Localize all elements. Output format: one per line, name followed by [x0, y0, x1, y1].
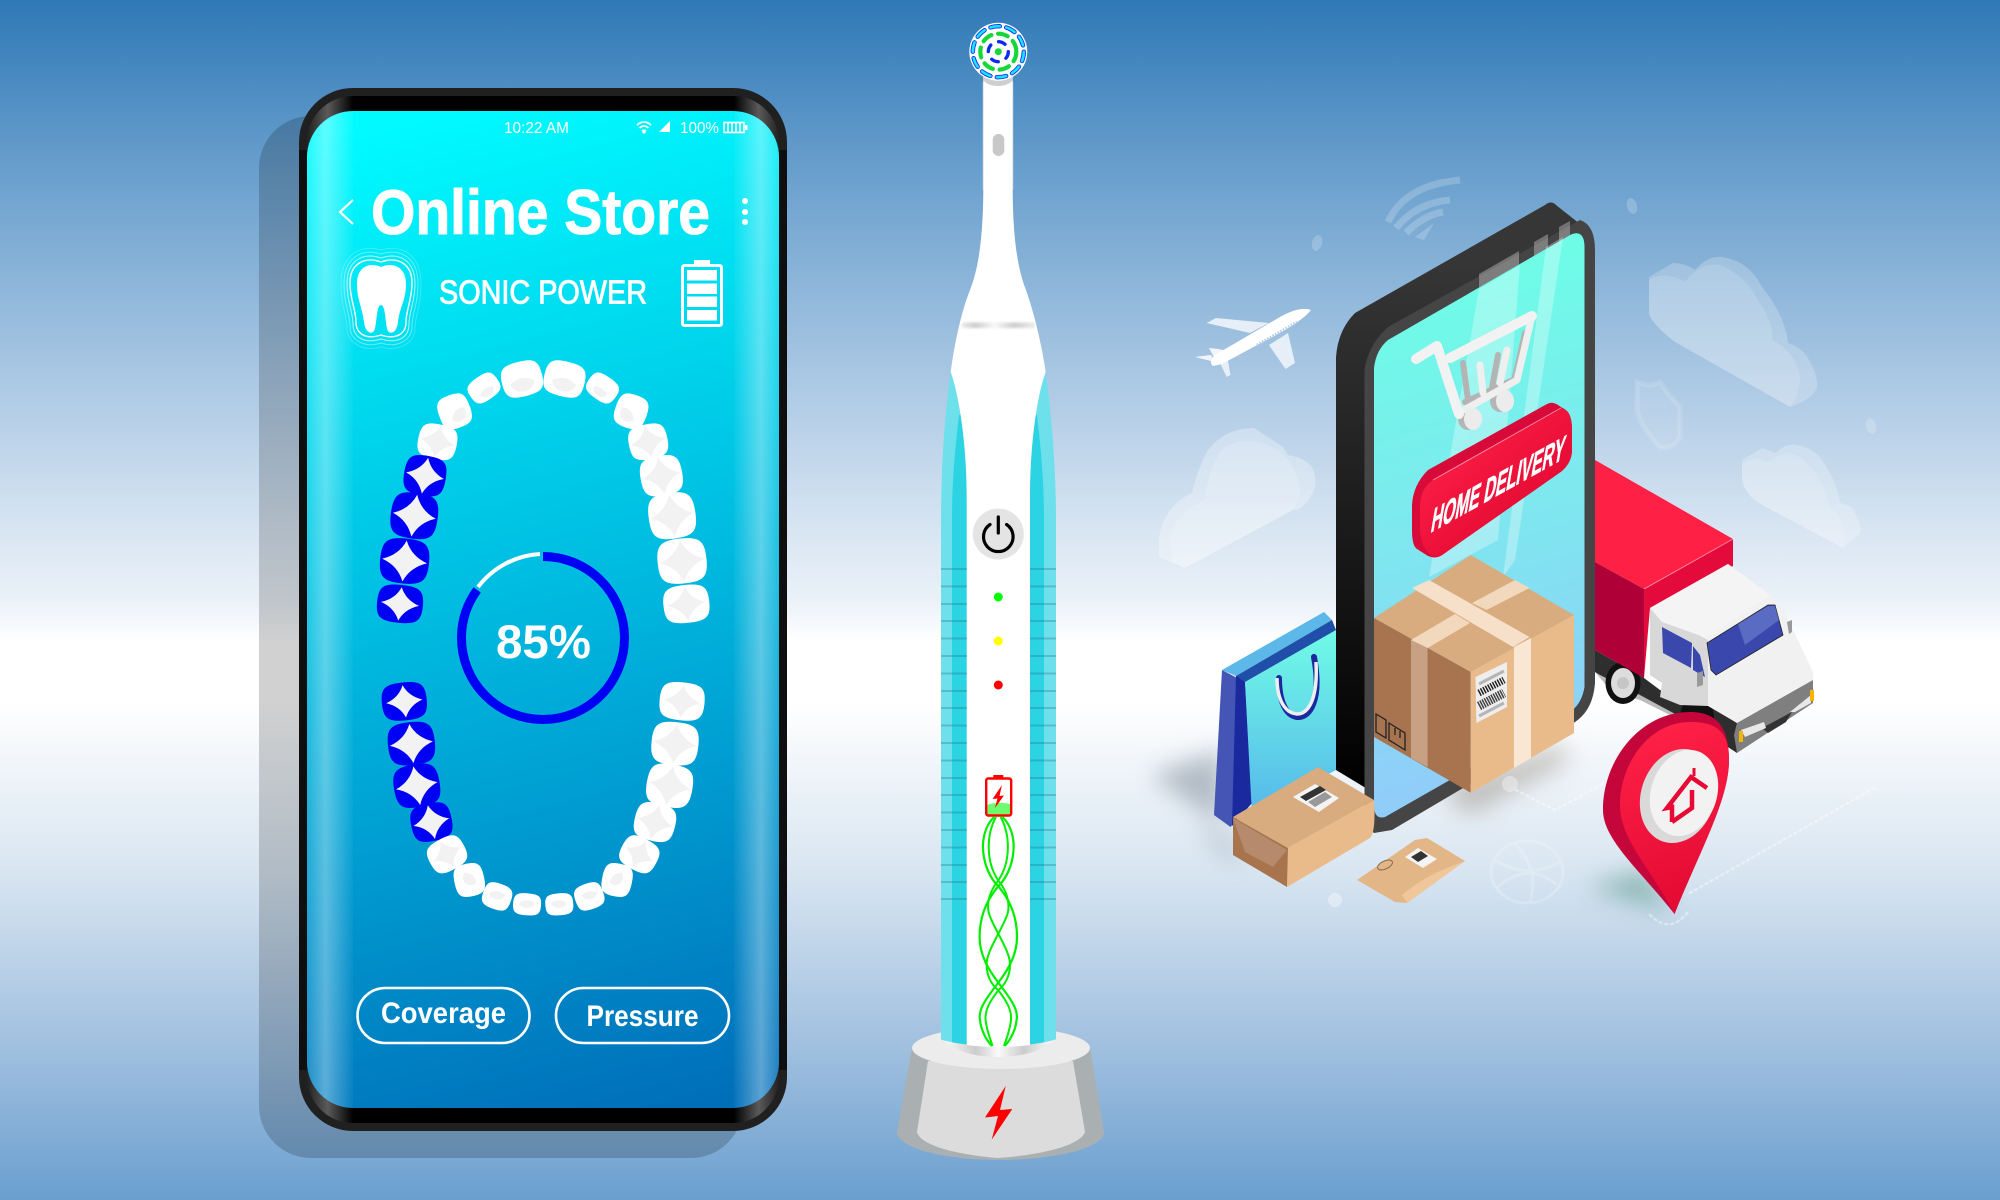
heading: sonic power: SONIC POWER: [439, 274, 647, 310]
phone side: [1336, 202, 1595, 833]
button: pressure: Pressure: [586, 1000, 698, 1033]
box shipping label: [1476, 662, 1507, 723]
button: coverage: [358, 988, 530, 1043]
upper left teeth highlighted blue: [375, 452, 449, 625]
upper teeth arch: [415, 357, 711, 625]
route stops: [1328, 776, 1518, 907]
truck cab: [1650, 564, 1814, 753]
icon: vibrating tooth: [341, 248, 421, 348]
icon: shopping cart: [1416, 316, 1532, 430]
large cardboard box: [1374, 555, 1574, 793]
lower teeth arch: [423, 680, 706, 916]
neck ring: [962, 322, 1035, 328]
background clouds: [1159, 257, 1860, 568]
phone frame: [1364, 220, 1595, 833]
pin disc: [1628, 739, 1729, 853]
icon: charging battery: [986, 775, 1011, 816]
icon: charging bolt: [985, 1086, 1012, 1140]
parcel label: [1293, 784, 1339, 812]
phone body: [299, 88, 787, 1131]
floating dots: [1310, 197, 1878, 435]
icon: menu dots: [742, 198, 748, 225]
handle body: [941, 78, 1056, 1060]
glass reflections: [1429, 237, 1563, 577]
panel: electric toothbrush: [897, 23, 1104, 1160]
icon: signal: [659, 121, 670, 132]
truck side mirrors: [1697, 620, 1792, 687]
icon: wifi: [637, 122, 651, 133]
shopping bag: [1214, 612, 1336, 827]
truck headlights: [1739, 690, 1814, 742]
small wrapped parcel: [1233, 767, 1374, 887]
badge: home delivery: [1412, 403, 1572, 557]
yellow status light: [994, 636, 1003, 646]
phone screen: [1374, 233, 1584, 817]
pouch label: [1405, 848, 1437, 868]
isometric smartphone: [1336, 202, 1595, 833]
truck chassis: [1595, 650, 1737, 753]
location pin: [1603, 712, 1729, 914]
cloud: left: [1159, 428, 1316, 568]
button: coverage: Coverage: [381, 997, 506, 1030]
icon: back chevron: [340, 200, 353, 224]
handle grip ticks: [941, 569, 1056, 899]
truck side window: [1662, 627, 1692, 668]
ground shadows: [1150, 745, 1672, 912]
truck cargo box: [1595, 460, 1733, 678]
cloud: right small: [1742, 445, 1860, 548]
icon: battery: [682, 260, 722, 326]
status bar: 10:22 AM: [504, 120, 569, 137]
truck ground strip: [1595, 672, 1737, 745]
neck slot: [993, 134, 1004, 156]
delivery truck: [1595, 460, 1814, 753]
icon: house: [1667, 768, 1707, 822]
sonic waves: [980, 817, 1017, 1046]
box handling icons: [1376, 714, 1405, 750]
green status light: [994, 592, 1003, 602]
phone screen: [307, 111, 779, 1108]
panel: home delivery illustration: [1150, 180, 1878, 924]
icon: shield: [1637, 382, 1680, 448]
truck grill: [1734, 680, 1813, 753]
status bar: 100%: [680, 120, 719, 137]
box tape: [1411, 580, 1531, 768]
bottom collar: [941, 1007, 1056, 1057]
progress ring: [462, 554, 624, 720]
icon: status battery: [724, 122, 748, 132]
title: Online Store: [371, 178, 710, 248]
cart wheels: [1458, 390, 1510, 430]
globe watermark: [1491, 841, 1563, 903]
icon: wifi signal: [1388, 180, 1460, 240]
status bar: [504, 120, 748, 137]
icon: power button: [973, 508, 1024, 560]
top bezel reflection: [1479, 221, 1570, 288]
truck front wheel: [1680, 697, 1714, 737]
button: pressure: [556, 988, 729, 1043]
bag handle: [1279, 657, 1317, 717]
percentage value: 85%: [496, 615, 591, 668]
brush head: [969, 23, 1027, 86]
panel: home delivery illustration: HOME DELIVERY: [1429, 429, 1568, 541]
truck windshield: [1707, 605, 1783, 675]
flat delivery pouch: [1357, 838, 1465, 903]
panel: app phone: [259, 88, 787, 1158]
cloud: upper right: [1649, 257, 1817, 407]
truck rear wheel: [1606, 662, 1640, 704]
dotted route: [1516, 780, 1876, 924]
phone drop shadow: [259, 116, 743, 1158]
lower left teeth highlighted blue: [380, 680, 455, 845]
icon: airplane: [1195, 309, 1311, 377]
red status light: [994, 680, 1003, 690]
charging base: [897, 1027, 1104, 1160]
